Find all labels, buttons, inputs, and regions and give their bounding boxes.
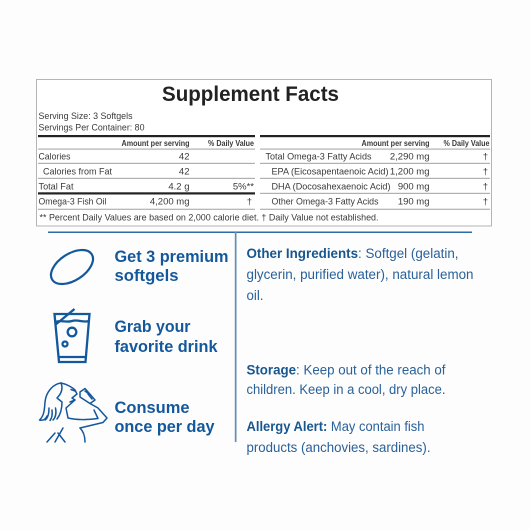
divider: vertical blue rule bbox=[235, 232, 236, 442]
text: other ingredients bbox=[246, 246, 474, 303]
text: storage: Storage: Keep out of the reach of bbox=[246, 362, 446, 378]
step 1 text: softgels bbox=[114, 267, 178, 285]
table: right omega-3 facts: † bbox=[483, 182, 488, 192]
icon: glass with drink bbox=[54, 309, 90, 362]
step 2 text: Grab your bbox=[114, 318, 191, 336]
table: right omega-3 facts: EPA (Eicosapentaenoic Acid) bbox=[272, 166, 388, 178]
table: left nutrition facts: 4,200 mg bbox=[150, 196, 190, 208]
table: right omega-3 facts: 900 mg bbox=[398, 182, 430, 192]
table: left nutrition facts: 42 bbox=[179, 152, 190, 162]
table: right omega-3 facts: † bbox=[483, 196, 488, 208]
step 3 text bbox=[114, 399, 215, 436]
table: left nutrition facts: Amount per serving bbox=[122, 139, 190, 148]
text: allergy alert bbox=[246, 419, 430, 455]
table: right omega-3 facts: % Daily Value bbox=[444, 139, 490, 148]
table: right omega-3 facts: † bbox=[483, 166, 488, 178]
footnote: ** Percent Daily Values are based on 2,000 calorie diet. † Daily Value not established. bbox=[40, 212, 378, 224]
panel: supplement facts bbox=[36, 80, 492, 226]
heading: supplement facts: Supplement Facts bbox=[162, 82, 339, 106]
text: other ingredients: glycerin, purified water), natural lemon bbox=[246, 267, 474, 282]
table: right omega-3 facts: Amount per serving bbox=[362, 139, 430, 148]
table: right omega-3 facts: 1,200 mg bbox=[390, 166, 430, 178]
table: right omega-3 facts: 2,290 mg bbox=[390, 152, 430, 162]
table: left nutrition facts: 42 bbox=[179, 166, 190, 178]
icon: woman drinking bbox=[40, 383, 107, 442]
table: right omega-3 facts: 190 mg bbox=[398, 196, 430, 208]
step 2 text: favorite drink bbox=[114, 338, 218, 356]
text: serving information: Servings Per Container: 80 bbox=[38, 122, 144, 134]
step 1 text bbox=[114, 248, 228, 285]
step 1 text: Get 3 premium bbox=[114, 248, 228, 266]
table: left nutrition facts: 5%** bbox=[233, 182, 254, 192]
table: left nutrition facts: % Daily Value bbox=[208, 139, 255, 148]
table: right omega-3 facts: DHA (Docosahexaenoic Acid) bbox=[272, 182, 390, 192]
table: left nutrition facts: Calories bbox=[38, 152, 71, 162]
text: allergy alert: products (anchovies, sardines). bbox=[246, 440, 430, 455]
table: right omega-3 facts: † bbox=[483, 152, 488, 162]
icon: softgel bbox=[45, 243, 99, 291]
step 2 text bbox=[114, 318, 218, 356]
table: left nutrition facts: Calories from Fat bbox=[43, 166, 112, 178]
text: serving information bbox=[38, 111, 144, 134]
divider: horizontal blue rule bbox=[48, 232, 472, 233]
step 3 text: Consume bbox=[114, 399, 190, 417]
table: right omega-3 facts bbox=[260, 135, 490, 210]
step 3 text: once per day bbox=[114, 418, 215, 436]
text: storage bbox=[246, 362, 446, 397]
text: serving information: Serving Size: 3 Softgels bbox=[38, 111, 133, 122]
table: left nutrition facts: 4.2 g bbox=[168, 182, 190, 192]
table: left nutrition facts bbox=[38, 135, 255, 210]
table: left nutrition facts: Omega-3 Fish Oil bbox=[38, 196, 106, 208]
table: right omega-3 facts: Other Omega-3 Fatty Acids bbox=[272, 196, 379, 208]
table: right omega-3 facts: Total Omega-3 Fatty Acids bbox=[266, 152, 372, 162]
text: other ingredients: oil. bbox=[246, 288, 264, 303]
text: other ingredients: Other Ingredients: Softgel (gelatin, bbox=[246, 246, 458, 261]
table: left nutrition facts: † bbox=[247, 196, 252, 208]
table: left nutrition facts: Total Fat bbox=[38, 182, 74, 192]
text: allergy alert: Allergy Alert: May contain fish bbox=[246, 419, 424, 434]
text: storage: children. Keep in a cool, dry place. bbox=[246, 382, 446, 397]
